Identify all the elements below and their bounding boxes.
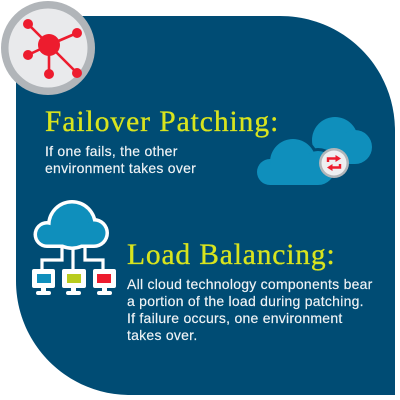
text: failover description: If one fails, the other	[45, 142, 178, 158]
text: load balancing description: All cloud technology components bear	[127, 276, 373, 292]
text: failover description: environment takes over	[45, 160, 196, 176]
text: failover description	[45, 142, 196, 176]
text: load balancing description: If failure occurs, one environment	[127, 310, 342, 326]
heading: Failover Patching: Failover Patching:	[45, 106, 279, 138]
heading: Load Balancing: Load Balancing:	[127, 239, 336, 271]
text: load balancing description: a portion of the load during patching.	[127, 293, 364, 309]
text: load balancing description: takes over.	[127, 327, 197, 343]
text: load balancing description	[126, 276, 373, 343]
